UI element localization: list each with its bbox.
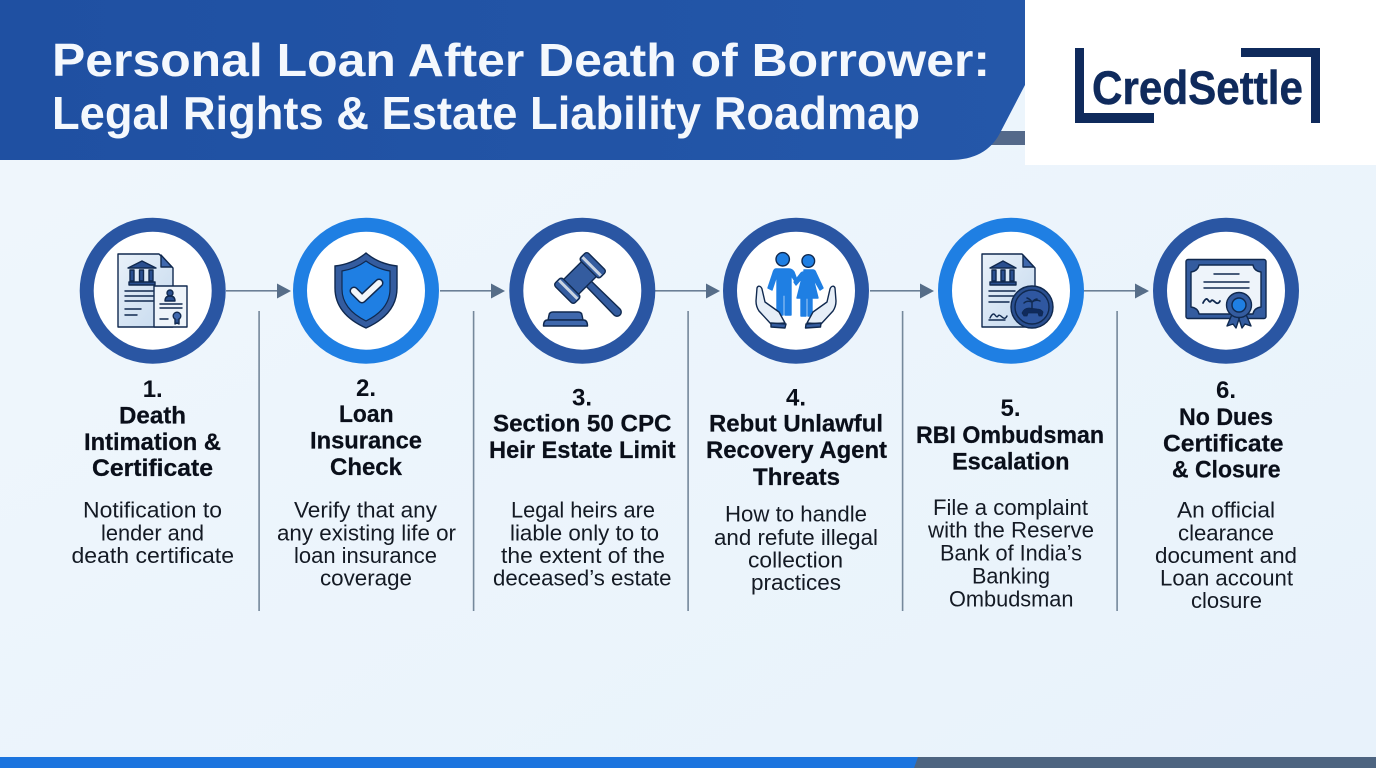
step 6 title: & Closure	[1172, 457, 1280, 484]
icon: family in caring hands	[756, 253, 836, 328]
step 6 title: Certificate	[1163, 431, 1284, 458]
step 4 title: 4.	[786, 385, 806, 412]
icon: bank document and certificate	[118, 254, 187, 327]
step 1 title: Death	[119, 402, 186, 429]
step 4 description	[714, 502, 878, 595]
step 3 description: deceased’s estate	[493, 566, 672, 591]
step 5 description	[927, 495, 1094, 612]
step 1 title	[84, 376, 221, 482]
step 4 description: How to handle	[725, 502, 867, 527]
step 1 description: death certificate	[72, 543, 234, 568]
step 2 title: 2.	[356, 375, 376, 402]
step 1 title: Certificate	[92, 455, 213, 482]
icon ring 3	[516, 225, 648, 357]
step 2 title: Loan	[339, 401, 394, 428]
title	[52, 34, 990, 139]
step 6 description: document and	[1155, 543, 1297, 568]
step 3 title: Section 50 CPC	[493, 411, 672, 438]
icon: gavel	[544, 251, 621, 326]
logo: CredSettle	[1025, 0, 1376, 165]
step 3 description: Legal heirs are	[511, 498, 655, 523]
step 2 description	[277, 498, 456, 591]
icon ring 1	[87, 225, 219, 357]
step 6 description: An official	[1177, 498, 1275, 523]
step 6 description: clearance	[1178, 521, 1274, 546]
step 2 title: Insurance	[310, 428, 422, 454]
step 6: no dues	[1155, 225, 1297, 613]
step 2 description: Verify that any	[294, 498, 437, 523]
step 6 title: 6.	[1216, 377, 1236, 404]
step 5 description: Ombudsman	[949, 587, 1074, 612]
step 5 title: RBI Ombudsman	[916, 422, 1104, 449]
step 5 title: Escalation	[952, 448, 1070, 476]
step 5: RBI ombudsman	[916, 225, 1104, 612]
step 5 description: with the Reserve	[927, 518, 1094, 543]
icon ring 5	[945, 225, 1077, 357]
header banner	[0, 0, 1025, 160]
step 6 title: No Dues	[1179, 404, 1273, 431]
step 5 description: Bank of India’s	[940, 541, 1082, 566]
step 4 description: practices	[751, 570, 841, 595]
title: Personal Loan After Death of Borrower:	[52, 34, 990, 86]
step 3 title: Heir Estate Limit	[489, 437, 676, 464]
step 2 title	[310, 375, 422, 481]
step 6 description: closure	[1191, 588, 1262, 613]
step 4 description: collection	[748, 548, 843, 573]
icon ring 6	[1160, 225, 1292, 357]
step 2 description: any existing life or	[277, 521, 456, 546]
step 6 description: Loan account	[1160, 566, 1293, 591]
step 1 description: lender and	[101, 521, 204, 546]
step 3 description	[493, 498, 672, 591]
step 3 title	[489, 385, 676, 464]
step 6 description	[1155, 498, 1297, 613]
step 3 description: the extent of the	[501, 543, 665, 568]
step 2 description: coverage	[320, 566, 412, 591]
step 1 title: Intimation &	[84, 429, 221, 456]
step 1: death intimation	[72, 225, 234, 568]
step 5 title	[916, 395, 1104, 476]
step 1 title: 1.	[143, 376, 163, 403]
icon: shield with check	[335, 253, 397, 328]
step 4 title: Recovery Agent	[706, 437, 887, 464]
step 5 title: 5.	[1000, 395, 1021, 422]
icon: certificate with rosette	[1186, 260, 1266, 328]
connector arrows	[226, 284, 1149, 298]
step 2: loan insurance	[277, 225, 456, 591]
title: Legal Rights & Estate Liability Roadmap	[52, 87, 920, 139]
step 5 description: Banking	[972, 564, 1050, 588]
step 6 title	[1163, 377, 1284, 484]
step 5 description: File a complaint	[933, 495, 1088, 520]
step 4 title: Rebut Unlawful	[709, 411, 883, 438]
step 2 title: Check	[330, 454, 403, 481]
icon ring 4	[730, 225, 862, 357]
step 4 title: Threats	[753, 464, 840, 491]
logo: CredSettle: CredSettle	[1092, 61, 1303, 114]
step 1 description	[72, 498, 234, 568]
icon ring 2	[300, 225, 432, 357]
step 3 description: liable only to to	[510, 521, 659, 546]
header accent bar	[985, 131, 1030, 145]
step 4 title	[706, 385, 887, 491]
step 4: rebut threats	[706, 225, 887, 595]
footer bar	[0, 757, 1376, 768]
step 4 description: and refute illegal	[714, 525, 878, 550]
icon: document with RBI seal	[982, 254, 1053, 328]
step 1 description: Notification to	[83, 498, 222, 523]
step 2 description: loan insurance	[294, 543, 437, 568]
step 3: section 50	[489, 225, 676, 591]
step 3 title: 3.	[572, 385, 592, 412]
